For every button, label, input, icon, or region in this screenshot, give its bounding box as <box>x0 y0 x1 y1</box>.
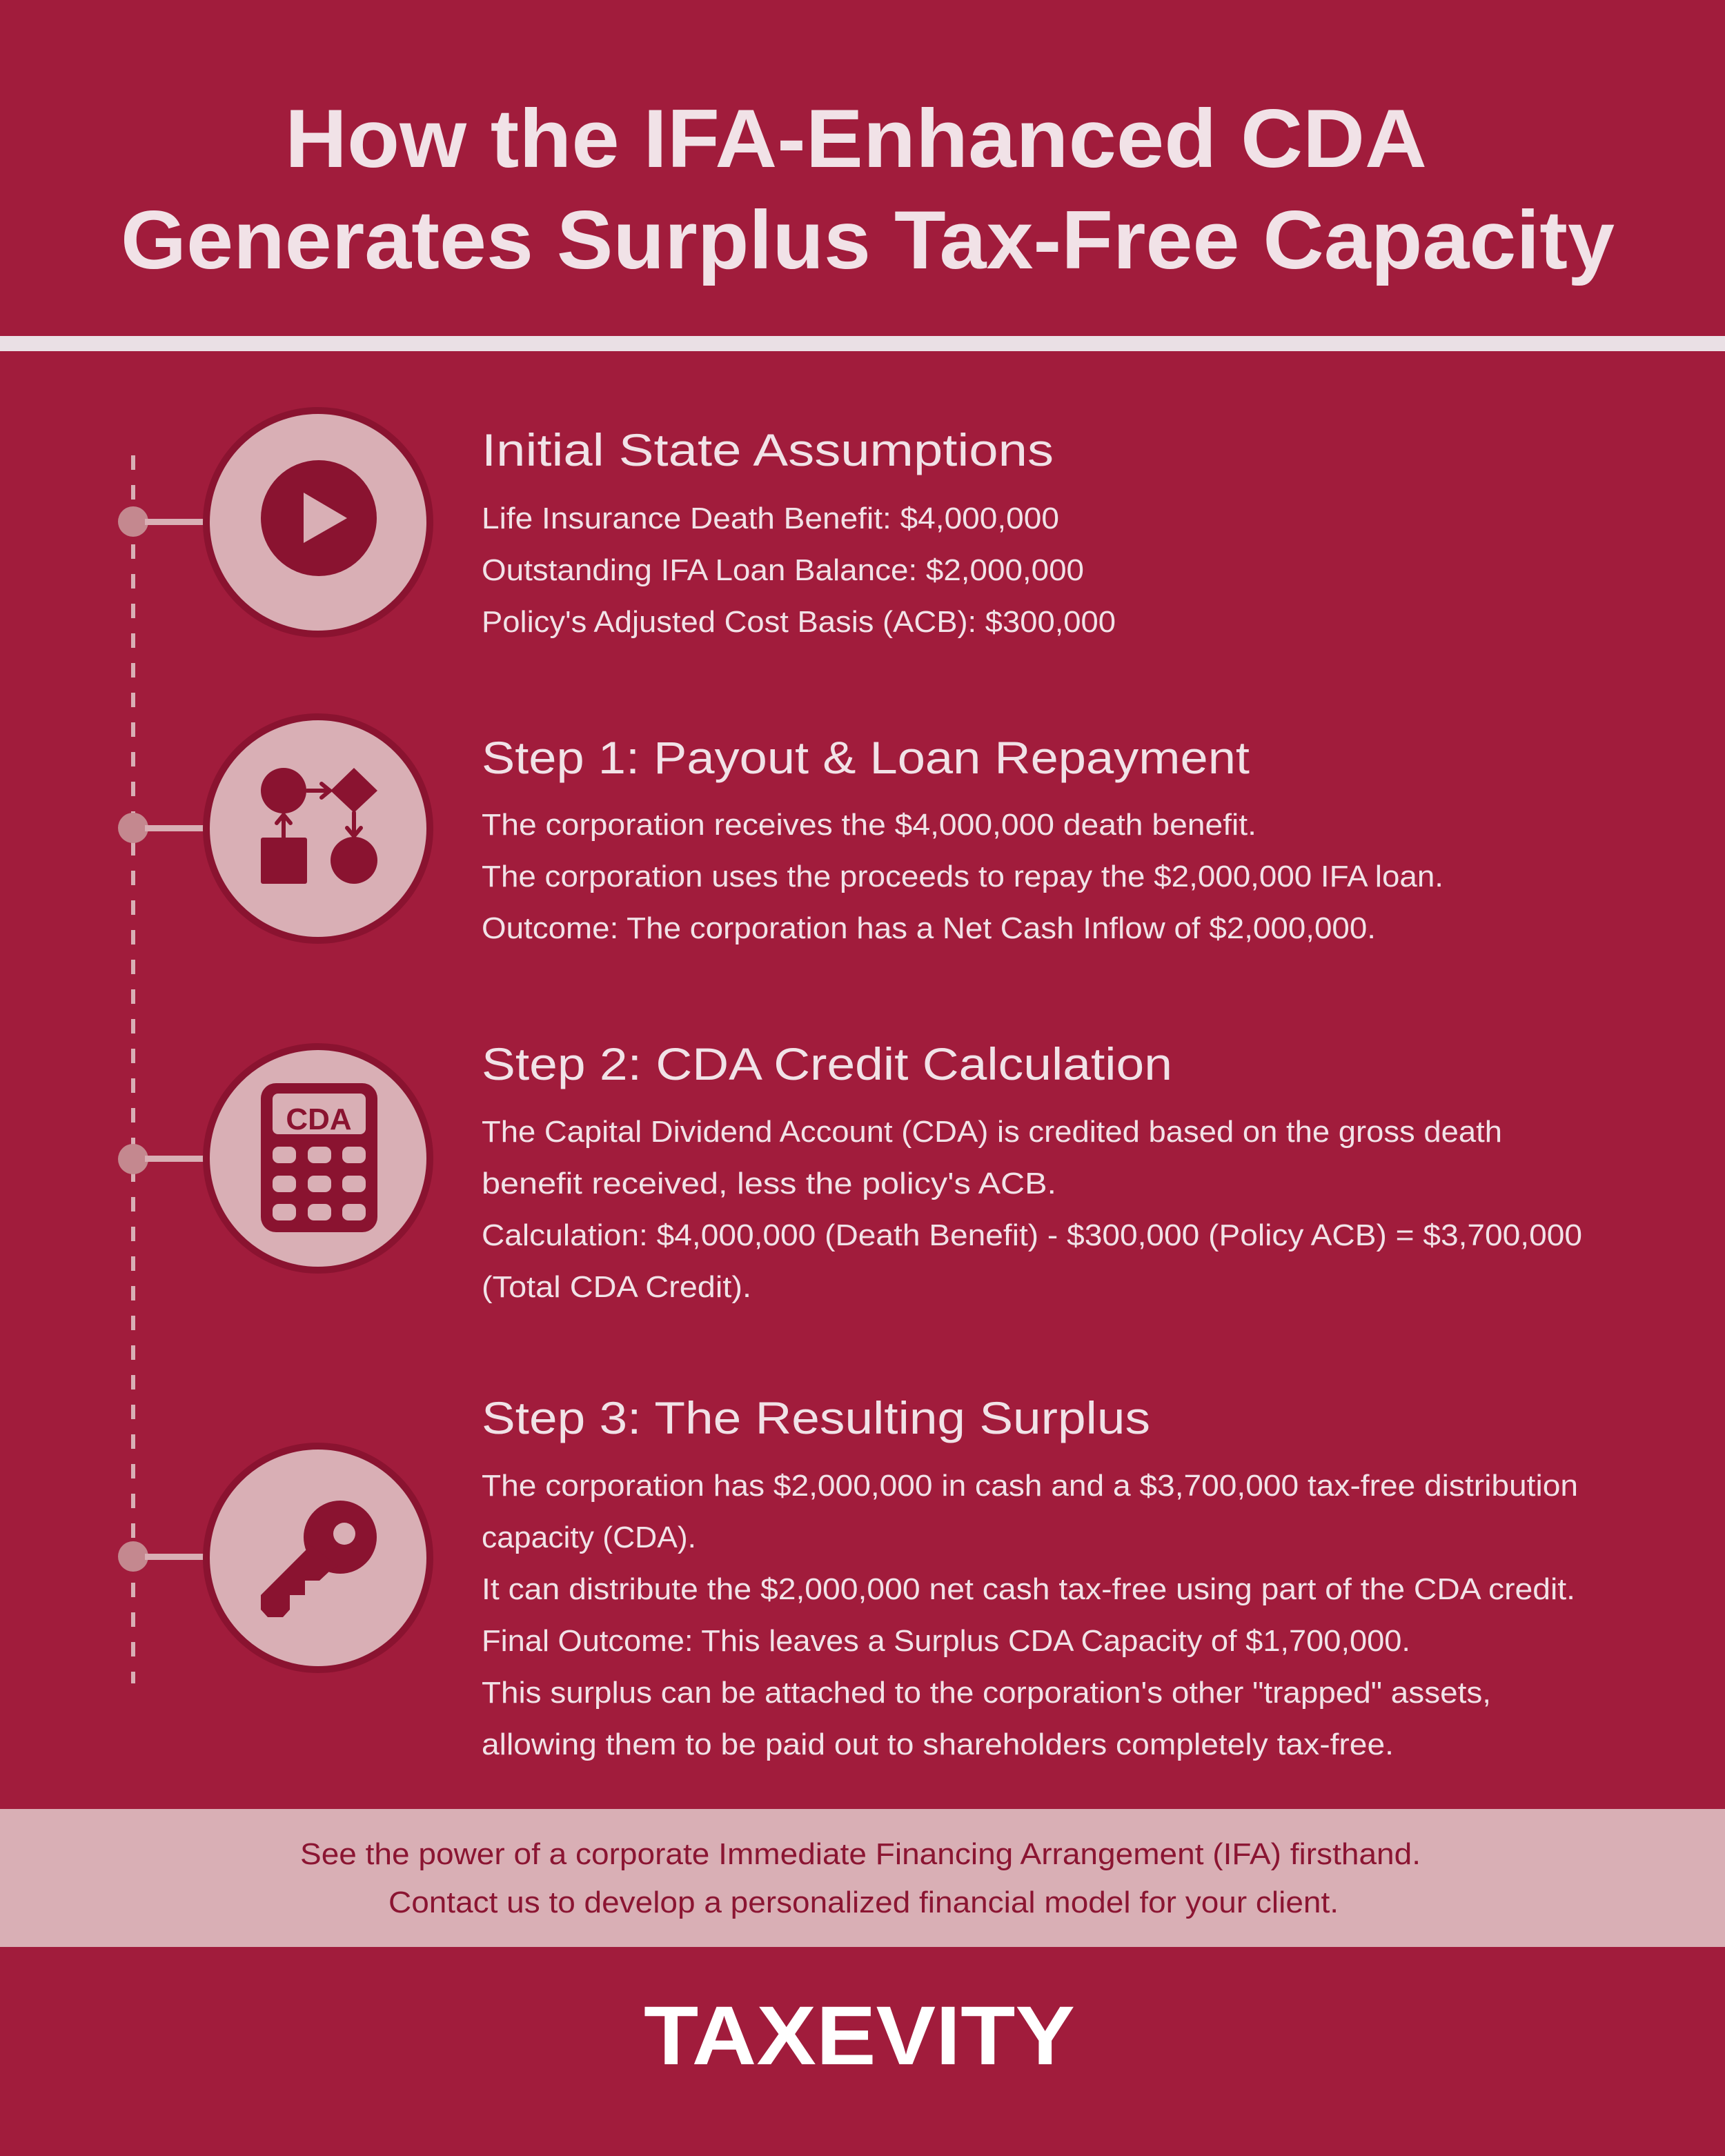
text: initial state <box>482 502 1116 639</box>
text: step 2: benefit received, less the policy's ACB. <box>482 1167 1056 1200</box>
title: Generates Surplus Tax-Free Capacity <box>121 194 1615 286</box>
footer call to action band: Contact us to develop a personalized financial model for your client. <box>388 1886 1339 1919</box>
footer call to action band <box>0 1809 1725 1947</box>
timeline markers <box>118 506 207 1572</box>
icon: key <box>206 1446 430 1670</box>
timeline: dashed line <box>131 455 135 1683</box>
text: step 3: capacity (CDA). <box>482 1521 696 1554</box>
logo: TAXEVITY: TAXEVITY <box>644 1988 1075 2082</box>
heading: step 3: Step 3: The Resulting Surplus <box>482 1392 1150 1443</box>
icon: flowchart <box>206 717 430 940</box>
text: step 1: Outcome: The corporation has a Net Cash Inflow of $2,000,000. <box>482 911 1376 945</box>
text: initial state: Outstanding IFA Loan Balance: $2,000,000 <box>482 553 1084 587</box>
heading: step 1: Step 1: Payout & Loan Repayment <box>482 732 1250 783</box>
footer call to action band: See the power of a corporate Immediate Financing Arrangement (IFA) firsthand. <box>300 1837 1421 1871</box>
text: step 3: Final Outcome: This leaves a Surplus CDA Capacity of $1,700,000. <box>482 1624 1410 1658</box>
text: step 2: (Total CDA Credit). <box>482 1270 751 1304</box>
text: step 2: Calculation: $4,000,000 (Death Benefit) - $300,000 (Policy ACB) = $3,700,000 <box>482 1218 1582 1252</box>
title: How the IFA-Enhanced CDA <box>285 92 1427 185</box>
text: step 3: allowing them to be paid out to shareholders completely tax-free. <box>482 1728 1394 1761</box>
heading: initial state: Initial State Assumptions <box>482 424 1054 475</box>
text: step 2: The Capital Dividend Account (CDA) is credited based on the gross death <box>482 1115 1502 1149</box>
text: step 1 <box>482 808 1443 945</box>
text: step 3: It can distribute the $2,000,000 net cash tax-free using part of the CDA credit. <box>482 1572 1575 1606</box>
text: step 3: This surplus can be attached to the corporation's other "trapped" assets, <box>482 1676 1491 1710</box>
icon: calculator: CDA <box>286 1102 352 1136</box>
text: step 2 <box>482 1115 1582 1304</box>
title <box>121 92 1615 286</box>
text: step 3: The corporation has $2,000,000 in cash and a $3,700,000 tax-free distribution <box>482 1469 1578 1503</box>
text: step 1: The corporation receives the $4,000,000 death benefit. <box>482 808 1256 842</box>
icon: calculator <box>206 1047 430 1270</box>
text: initial state: Policy's Adjusted Cost Basis (ACB): $300,000 <box>482 605 1116 639</box>
text: step 1: The corporation uses the proceeds to repay the $2,000,000 IFA loan. <box>482 860 1443 893</box>
heading: step 2: Step 2: CDA Credit Calculation <box>482 1038 1172 1089</box>
text: step 3 <box>482 1469 1578 1761</box>
text: initial state: Life Insurance Death Benefit: $4,000,000 <box>482 502 1059 535</box>
icon: play <box>206 411 430 634</box>
